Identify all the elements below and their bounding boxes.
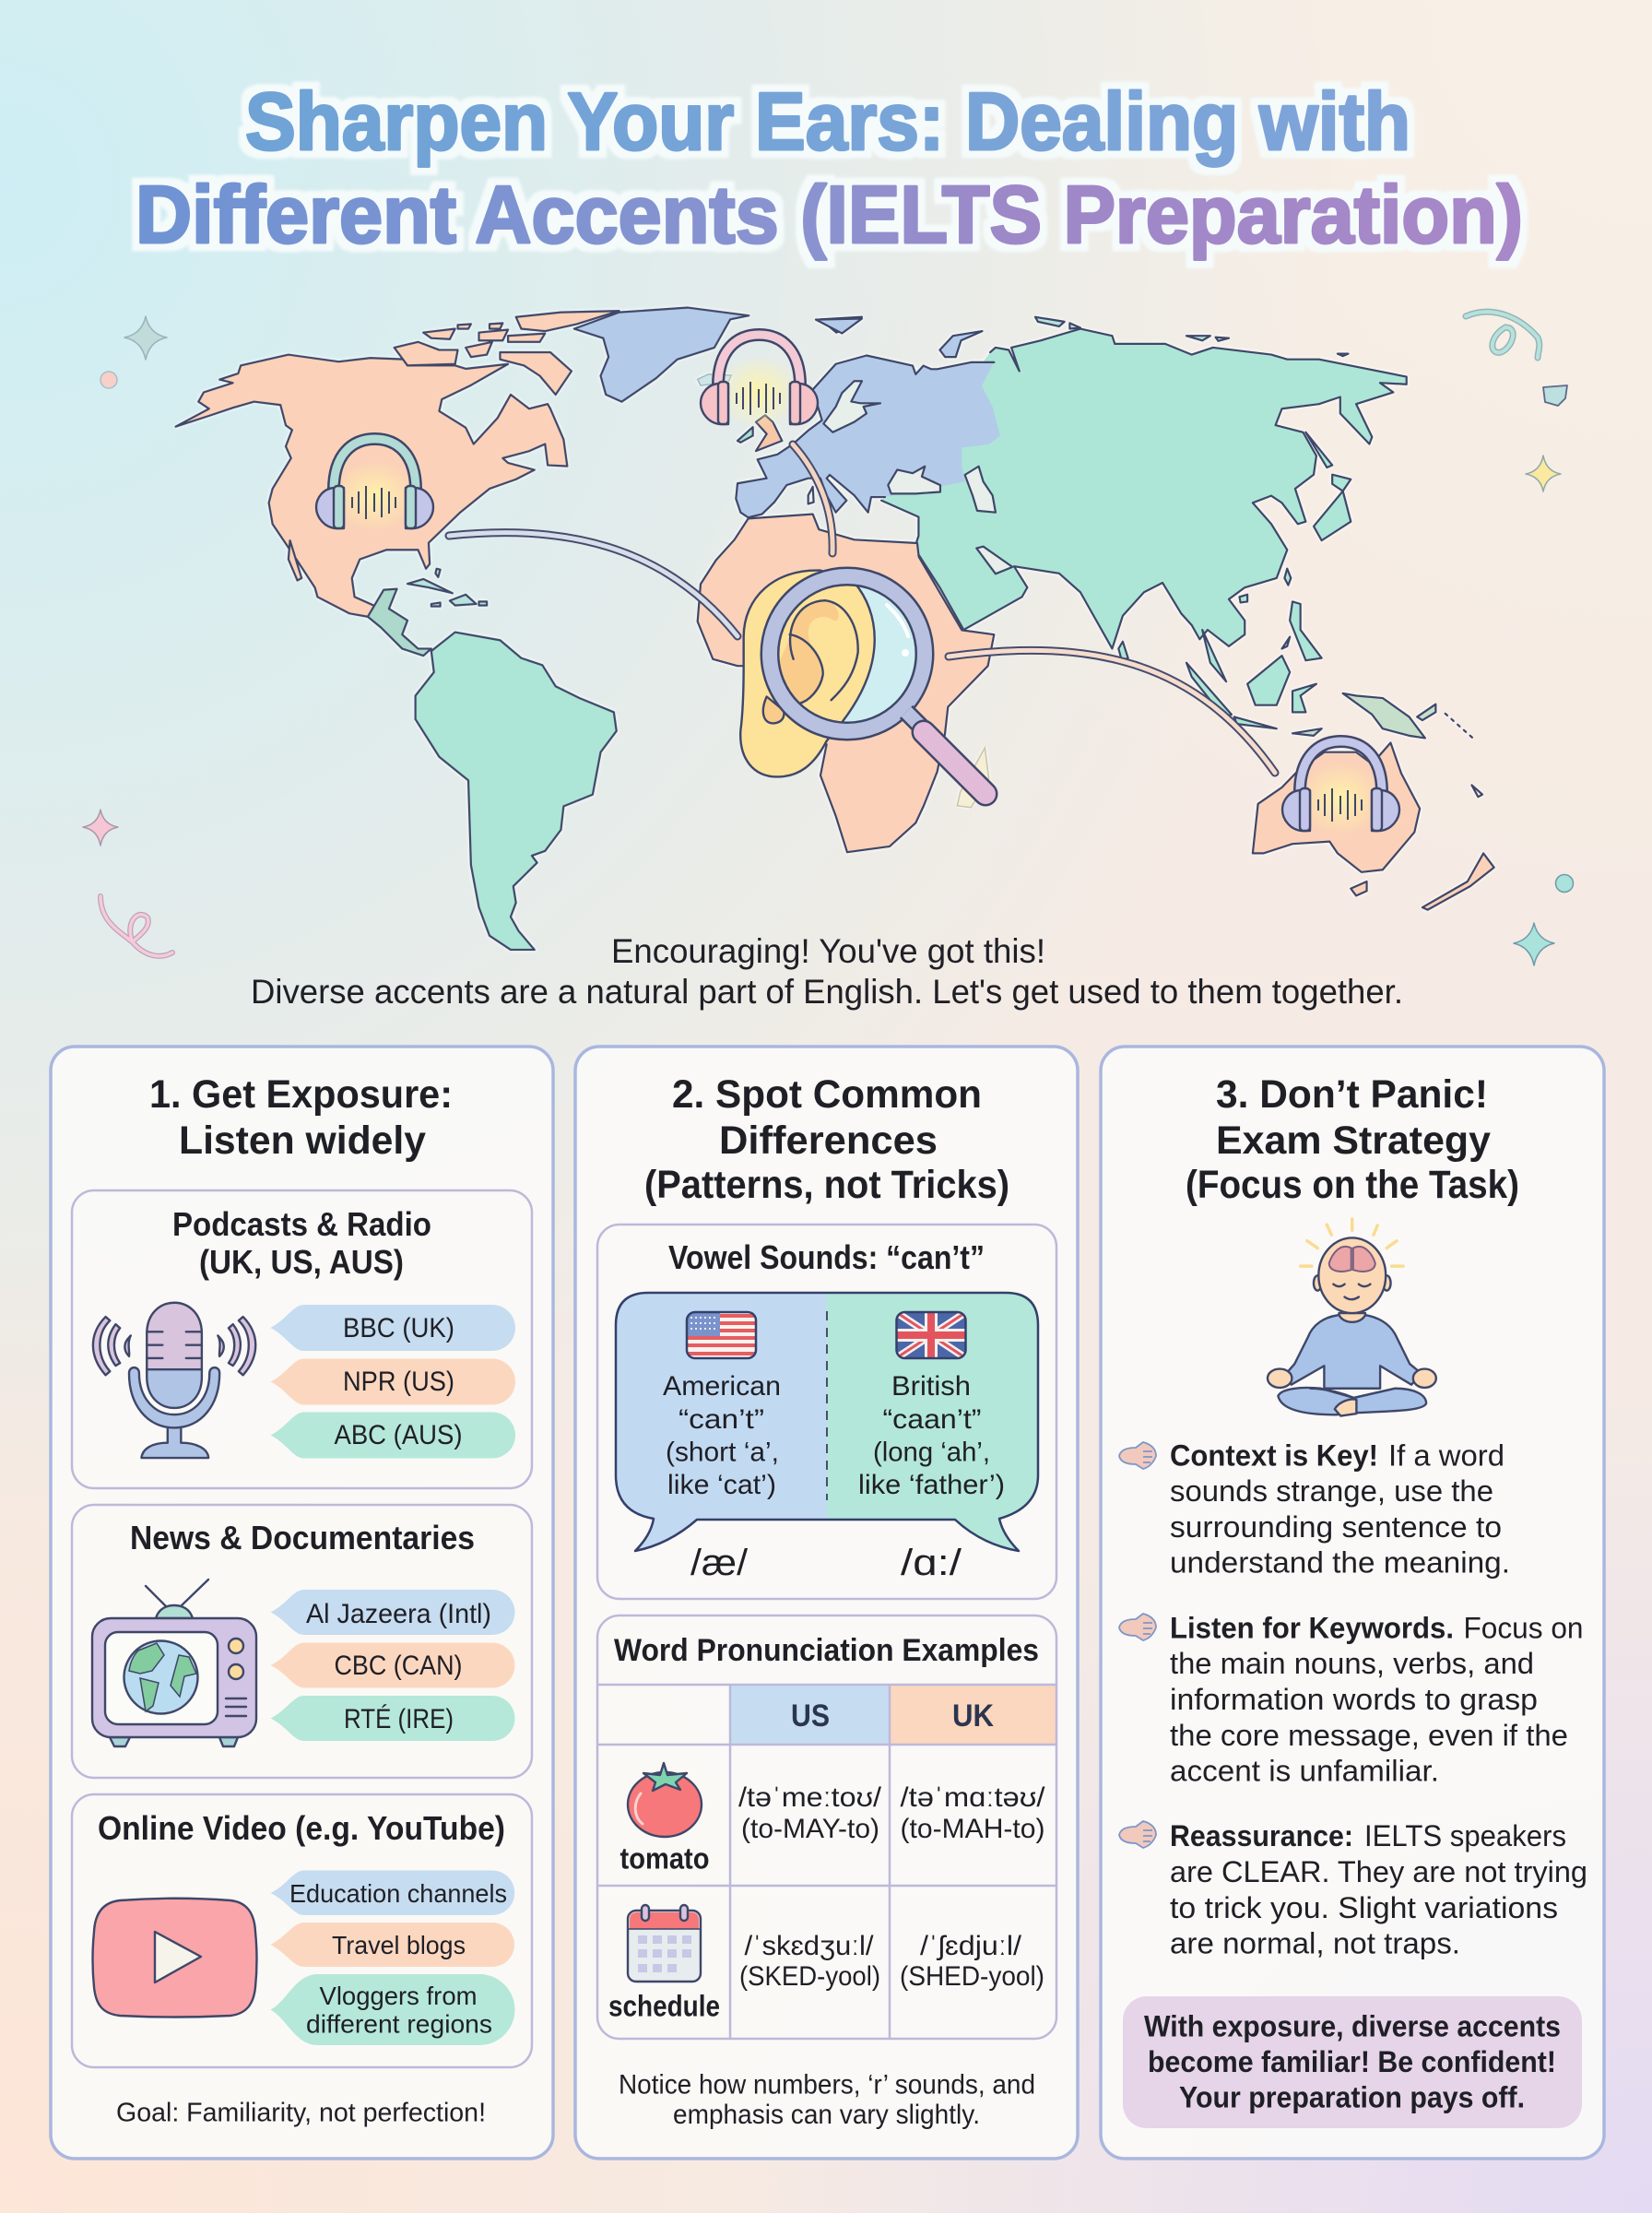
table: word pronunciation examples [597,1615,1056,2039]
bullet: Listen for Keywords: information words to grasp [1170,1683,1538,1716]
icon: tomato [628,1763,702,1837]
heading: panel 1: Listen widely [179,1118,426,1163]
card: vowel sounds [597,1225,1056,1599]
pill: CBC [271,1643,514,1687]
bullet: Listen for Keywords: accent is unfamiliar. [1170,1754,1439,1787]
heading: panel 3: 3. Don’t Panic! [1216,1072,1488,1117]
heading: panel 2: Differences [719,1118,938,1163]
map: Americas [176,308,749,950]
panel: 1. Get Exposure [51,1047,553,2159]
map: Africa [698,515,994,852]
icon: handle [906,712,927,733]
world map [176,308,1494,950]
text: British: (long ‘ah’, [873,1437,990,1468]
bullet: Reassurance [1119,1819,1587,1960]
pill: Education channels: Education channels [289,1879,507,1908]
panel: 2. Spot Common Differences [575,1047,1078,2159]
table text: schedule row [739,1931,1044,1992]
icon: UK flag [896,1312,966,1358]
text: British: “caan’t” [883,1404,981,1435]
bullet: Context is Key: understand the meaning. [1170,1545,1510,1579]
table text: schedule row: (SKED-yool) [739,1961,880,1992]
icon: video play button [92,1899,256,2018]
table: word pronunciation examples: schedule [608,1990,720,2023]
arcs linking headphones to the ear [449,444,1275,773]
table text: tomato row: /təˈmɑːtəʊ/ [900,1782,1045,1813]
pill: CBC: CBC (CAN) [334,1651,463,1681]
pill: Vloggers: Vloggers from [319,1982,478,2010]
title: Different Accents (IELTS Preparation) [136,169,1523,260]
text: American: like ‘cat’) [667,1470,776,1500]
icon: magnifying glass over ear [740,571,985,794]
bullet: Context is Key [1119,1438,1510,1579]
icon: headphones Australia [1282,741,1399,835]
pill: Al Jazeera: Al Jazeera (Intl) [306,1599,491,1629]
bullet: Listen for Keywords [1119,1612,1584,1787]
icon: microphone [93,1303,255,1458]
table: word pronunciation examples: Word Pronunciation Examples [614,1633,1039,1668]
icon: hand [1119,1614,1156,1640]
bullet: Reassurance: Reassurance: [1170,1819,1353,1852]
card: News & Documentaries: News & Documentaries [130,1519,475,1556]
tagline: Encouraging! You've got this! [611,932,1045,970]
pill: Education channels [271,1870,514,1915]
bullet: Context is Key: sounds strange, use the [1170,1474,1493,1508]
speech bubble comparison [616,1293,1038,1551]
callout: encouragement [1123,1996,1582,2128]
bullet: Listen for Keywords: Focus on [1464,1612,1584,1645]
table text: tomato row: (to-MAY-to) [741,1814,879,1844]
text: British: like ‘father’) [858,1470,1005,1500]
bullet: Reassurance: are normal, not traps. [1170,1927,1460,1960]
table text: tomato row [738,1782,1045,1844]
heading: panel 2: 2. Spot Common [672,1072,982,1117]
pill: Al Jazeera [271,1590,514,1635]
card: vowel sounds: Vowel Sounds: “can’t” [668,1238,985,1276]
icon: US flag [687,1312,756,1358]
bullet: Reassurance: are CLEAR. They are not trying [1170,1855,1587,1888]
text: British: British [891,1371,971,1402]
heading: panel 3: (Focus on the Task) [1186,1163,1519,1207]
callout: encouragement: Your preparation pays off. [1179,2080,1525,2113]
heading: panel 2: (Patterns, not Tricks) [644,1163,1009,1207]
title [136,76,1523,260]
card: Online Video [72,1794,532,2067]
pill: NPR [271,1359,515,1405]
note text [619,2069,1035,2130]
pill: Travel blogs [271,1923,514,1967]
card: Podcasts & Radio [72,1190,532,1488]
table: word pronunciation examples: US [791,1698,830,1734]
icon: TV with globe [92,1580,256,1746]
tagline: Diverse accents are a natural part of English. Let's get used to them together. [251,973,1403,1011]
bullet: Context is Key: Context is Key! [1170,1438,1378,1472]
icon: headphones North America [316,439,433,531]
table: word pronunciation examples: UK [952,1698,994,1734]
icon: headphones Europe [701,335,818,429]
phonetic symbols: /ɑ:/ [901,1543,962,1583]
callout: encouragement: With exposure, diverse accents [1144,2010,1561,2043]
heading: panel 3 [1186,1072,1519,1207]
bullet: Listen for Keywords: the core message, even if the [1170,1719,1568,1752]
bullet: Context is Key: If a word [1388,1438,1504,1472]
note text: emphasis can vary slightly. [673,2100,980,2130]
icon: calendar [628,1905,701,1982]
bullet: Listen for Keywords: the main nouns, verbs, and [1170,1647,1534,1680]
title: Sharpen Your Ears: Dealing with [245,76,1410,167]
goal text: Goal: Familiarity, not perfection! [116,2099,486,2128]
bullet: Reassurance: to trick you. Slight variations [1170,1891,1558,1924]
table text: schedule row: /ˈʃɛdjuːl/ [920,1931,1022,1961]
icon: hand [1119,1442,1156,1469]
pill: ABC [271,1413,515,1459]
text: American: (short ‘a’, [666,1437,779,1468]
bullet: Listen for Keywords: Listen for Keywords. [1170,1612,1454,1645]
map: Europe [698,319,1012,852]
tagline [251,932,1403,1011]
bullet: Context is Key: surrounding sentence to [1170,1510,1502,1544]
card: Online Video: Online Video (e.g. YouTube) [98,1809,505,1847]
pill: NPR: NPR (US) [343,1367,454,1397]
heading: panel 3: Exam Strategy [1216,1118,1491,1163]
pill: BBC [271,1305,515,1351]
icon: lens ring [770,576,925,731]
phonetic symbols [690,1543,962,1583]
heading: panel 2 [644,1072,1009,1207]
table text: schedule row: (SHED-yool) [900,1961,1044,1992]
table: word pronunciation examples: tomato [620,1842,710,1876]
table text: schedule row: /ˈskɛdʒuːl/ [745,1931,874,1961]
pill: RTÉ [271,1696,514,1741]
table text: tomato row: (to-MAH-to) [900,1814,1045,1844]
pill: Vloggers [271,1974,514,2045]
text: American: American [663,1371,781,1402]
pill: RTÉ: RTÉ (IRE) [344,1704,454,1734]
text: American [663,1371,781,1500]
card: News & Documentaries [72,1505,532,1778]
card: Podcasts & Radio: Podcasts & Radio [172,1205,431,1243]
heading: panel 1 [149,1072,453,1163]
table text: tomato row: /təˈmeːtoʊ/ [738,1782,882,1813]
callout: encouragement: become familiar! Be confident! [1148,2045,1556,2078]
bullet: Reassurance: IELTS speakers [1364,1819,1566,1852]
pill: Vloggers: different regions [306,2010,492,2038]
icon: hand [1119,1821,1156,1848]
panel: 3. Don't Panic [1101,1047,1604,2159]
pill: Travel blogs: Travel blogs [332,1931,466,1959]
icon: meditating person [1268,1219,1436,1416]
text: British [858,1371,1005,1500]
icon: ear [740,571,875,776]
phonetic symbols: /æ/ [690,1543,749,1583]
decorative sparkles [83,312,1573,965]
pill: BBC: BBC (UK) [343,1313,454,1343]
pill: ABC: ABC (AUS) [334,1420,463,1450]
card: Podcasts & Radio: (UK, US, AUS) [199,1243,404,1281]
note text: Notice how numbers, ‘r’ sounds, and [619,2069,1035,2101]
map: Asia and Oceania [820,317,1494,910]
text: American: “can’t” [678,1404,764,1435]
heading: panel 1: 1. Get Exposure: [149,1072,453,1117]
